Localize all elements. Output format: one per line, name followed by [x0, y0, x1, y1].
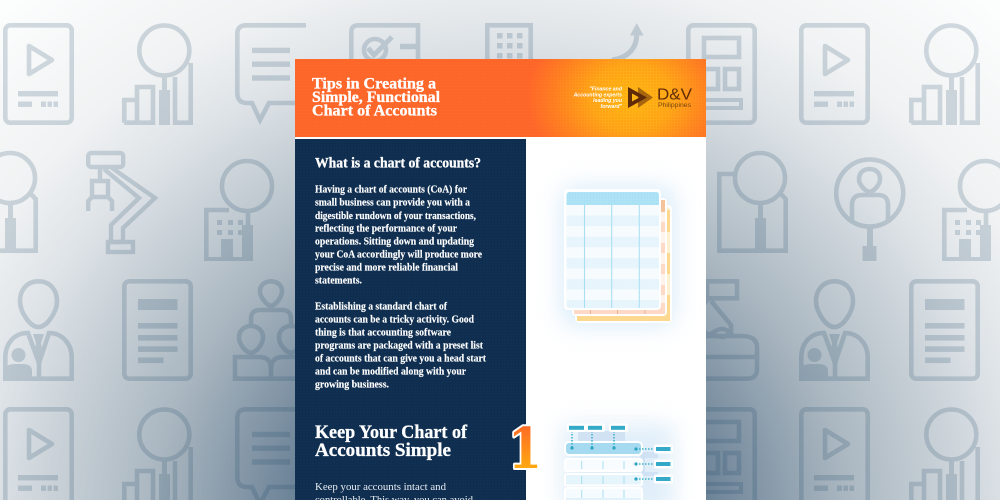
callout connectors: [572, 431, 656, 479]
title: Tips in Creating a: [312, 76, 436, 93]
blue front table: [564, 189, 661, 310]
icon: office building: [487, 25, 531, 62]
heading: keep your chart of accounts simple: Keep Your Chart of: [315, 423, 468, 443]
paragraph one: reflecting the performance of your: [315, 224, 457, 235]
icon: video document bottom right: [801, 409, 868, 500]
icon: group of people: [235, 281, 307, 379]
icon: video document right: [801, 25, 868, 123]
table rows: [565, 442, 642, 500]
icon: magnifier over building: [204, 161, 272, 261]
paragraph two: growing business.: [315, 379, 389, 390]
heading: keep your chart of accounts simple: Accounts Simple: [315, 441, 451, 461]
icon: video document: [5, 25, 72, 123]
title: Simple, Functional: [312, 89, 441, 106]
icon: page layout bottom: [688, 409, 755, 500]
icon: growth arrow: [612, 23, 644, 60]
paragraph one: precise and more reliable financial: [315, 263, 458, 274]
logo tagline: Accounting experts: [573, 92, 622, 98]
navy text column: [295, 139, 526, 500]
icon: magnifier over building right: [942, 161, 1000, 261]
orange middle sheet: [572, 198, 667, 316]
paragraph one: small business can provide you with a: [315, 198, 471, 209]
paragraph one: digestible rundown of your transactions,: [315, 211, 476, 222]
logo wordmark: [657, 86, 693, 109]
icon: speech bubble: [237, 25, 306, 120]
icon: report document right: [911, 281, 978, 379]
illustration: annotated accounts table: [562, 424, 674, 500]
side callout labels: [654, 444, 673, 484]
logo tagline: [573, 86, 623, 110]
yellow back sheet: [575, 205, 672, 323]
logo wordmark: Philippines: [658, 102, 691, 109]
title: Chart of Accounts: [312, 103, 437, 120]
paragraph two: Establishing a standard chart of: [315, 301, 447, 312]
paragraph two: of accounts that can give you a head start: [315, 353, 486, 364]
section text: Keep your accounts intact and: [315, 481, 446, 493]
icon: robot arm: [88, 153, 155, 252]
icon: businessman right: [799, 281, 868, 381]
icon: checklist document: [351, 23, 420, 62]
icon: page layout: [688, 25, 755, 123]
icon: report document: [124, 281, 191, 379]
icon: magnifier over person: [836, 160, 903, 261]
shadow patches: [578, 431, 658, 476]
infographic page panel: [295, 59, 706, 500]
icon: magnifier chart bottom: [124, 410, 191, 500]
icon: businessman: [3, 281, 72, 381]
paragraph one: operations. Sitting down and updating: [315, 237, 475, 248]
icon: magnifier over document left: [0, 153, 36, 253]
icon: magnifier over document right: [719, 153, 786, 253]
paragraph two: accounts can be a tricky activity. Good: [315, 314, 474, 325]
paragraph one: [315, 185, 482, 286]
logo tagline: "Finance and: [589, 86, 623, 92]
icon: video document bottom: [5, 409, 72, 500]
section text: [315, 481, 473, 500]
icon: magnifier over bar chart: [124, 26, 191, 125]
paragraph two: [315, 301, 486, 390]
logo tagline: forward": [601, 104, 623, 110]
heading: what is a chart of accounts: What is a chart of accounts?: [315, 156, 481, 172]
title: [312, 76, 441, 120]
logo mark: [628, 87, 653, 108]
paragraph two: and can be modified along with your: [315, 366, 466, 377]
paragraph two: programs are packaged with a preset list: [315, 340, 483, 351]
icon: magnifier chart bottom right: [911, 410, 978, 500]
logo tagline: leading you: [593, 98, 623, 104]
top callout labels: [567, 424, 628, 432]
header banner: [295, 59, 706, 137]
icon: stacked hands and base: [689, 281, 757, 379]
paragraph two: thing is that accounting software: [315, 327, 451, 338]
paragraph one: Having a chart of accounts (CoA) for: [315, 185, 467, 196]
logo wordmark: D&V: [657, 86, 693, 104]
icon: magnifier over bar chart right: [911, 26, 978, 125]
connector dots: [570, 446, 638, 481]
numeral one: 1: [508, 416, 542, 482]
paragraph one: statements.: [315, 275, 362, 286]
heading: keep your chart of accounts simple: [315, 423, 468, 461]
illustration: stacked chart of accounts sheets: [564, 189, 672, 323]
icon: speech bubble bottom: [237, 409, 306, 500]
paragraph one: your CoA accordingly will produce more: [315, 250, 482, 261]
